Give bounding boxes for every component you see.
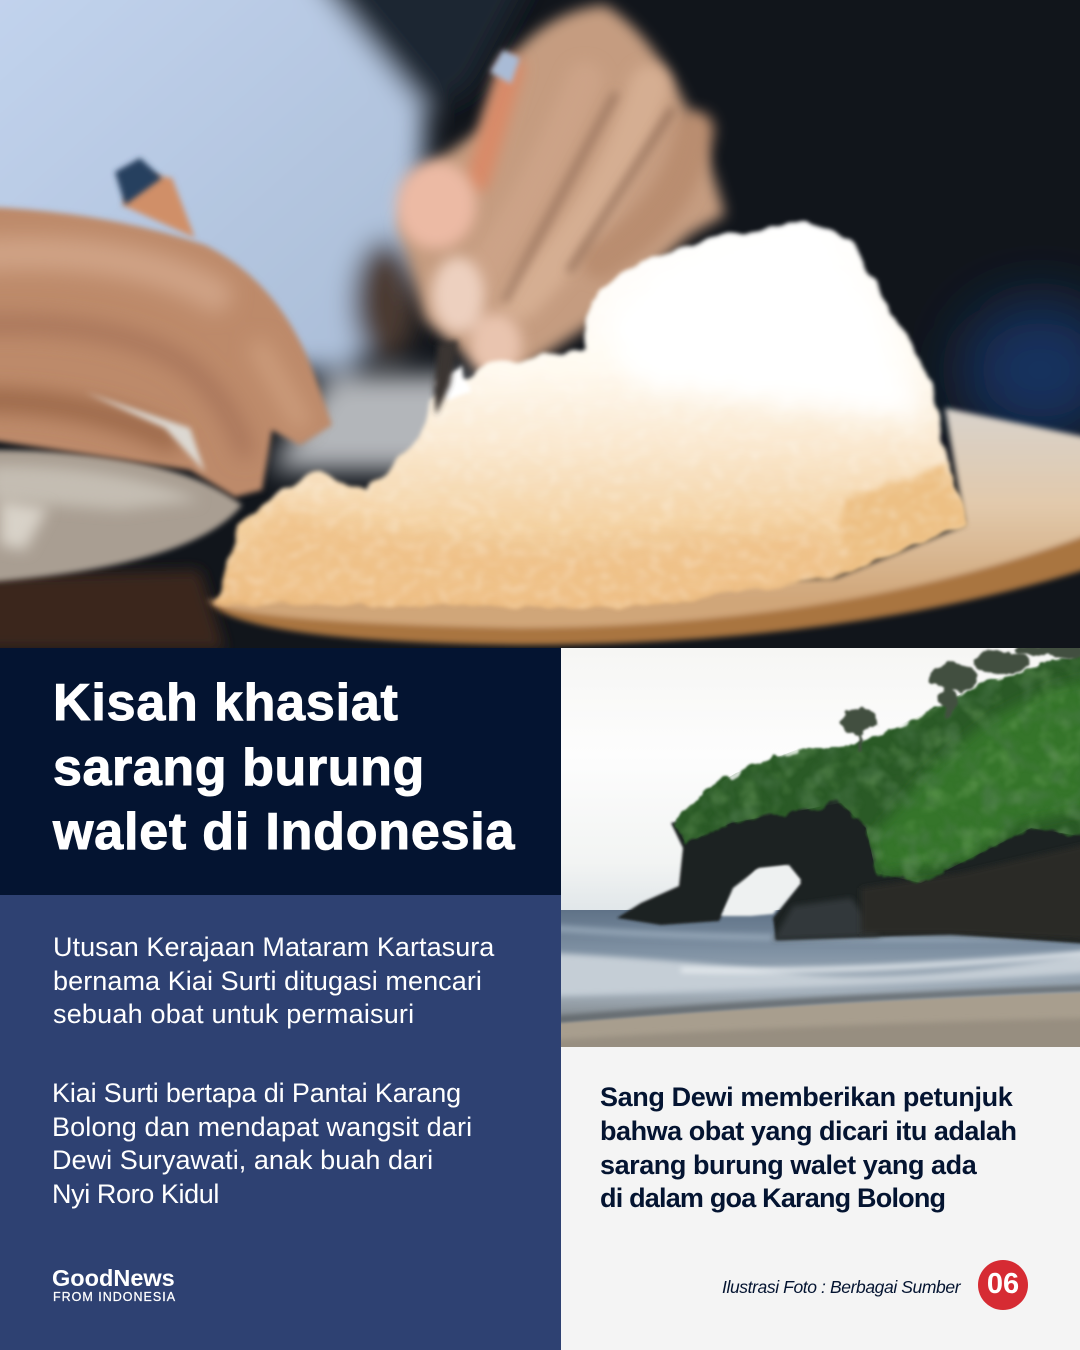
heading — [52, 674, 516, 861]
page number badge: 06 — [987, 1268, 1019, 1300]
nest — [215, 220, 965, 607]
text block: first paragraph: bernama Kiai Surti ditugasi mencari — [53, 966, 482, 996]
plate — [205, 408, 1080, 645]
page number badge — [978, 1260, 1028, 1310]
text block: second paragraph: Nyi Roro Kidul — [52, 1178, 219, 1208]
photo: hands cutting edible bird's nest on a plate — [0, 0, 1080, 648]
panel: story text — [0, 895, 561, 1350]
background shapes — [0, 0, 540, 470]
heading: walet di Indonesia — [53, 803, 515, 861]
text block: first paragraph: sebuah obat untuk permaisuri — [53, 999, 414, 1029]
photo credit: Ilustrasi Foto : Berbagai Sumber — [722, 1277, 960, 1297]
front hand — [0, 207, 332, 497]
text block: second paragraph: Bolong dan mendapat wangsit dari — [52, 1112, 472, 1142]
panel: revelation text — [561, 1047, 1080, 1350]
back hand — [398, 5, 725, 385]
text block: bold message: sarang burung walet yang ada — [600, 1150, 976, 1180]
heading: sarang burung — [53, 739, 425, 797]
text block: first paragraph — [53, 932, 494, 1029]
text block: first paragraph: Utusan Kerajaan Mataram Kartasura — [53, 932, 494, 962]
photo: Karang Bolong sea arch — [561, 648, 1080, 1047]
text block: bold message: di dalam goa Karang Bolong — [600, 1183, 945, 1213]
left saucer — [0, 450, 242, 582]
logo: GoodNews from Indonesia — [52, 1265, 176, 1304]
logo: GoodNews from Indonesia: FROM INDONESIA — [53, 1290, 176, 1304]
rock arch — [617, 678, 1080, 944]
heading: Kisah khasiat — [53, 674, 399, 732]
text block: second paragraph: Dewi Suryawati, anak buah dari — [52, 1145, 433, 1175]
text block: bold message: bahwa obat yang dicari itu adalah — [600, 1116, 1017, 1146]
text block: second paragraph — [52, 1078, 472, 1208]
title panel — [0, 648, 561, 895]
text block: bold message: Sang Dewi memberikan petunjuk — [600, 1082, 1012, 1112]
trees — [841, 642, 1080, 750]
vegetation — [673, 648, 1080, 883]
text block: second paragraph: Kiai Surti bertapa di Pantai Karang — [52, 1078, 461, 1108]
logo: GoodNews from Indonesia: GoodNews — [52, 1265, 175, 1291]
text block: bold message — [600, 1082, 1017, 1213]
